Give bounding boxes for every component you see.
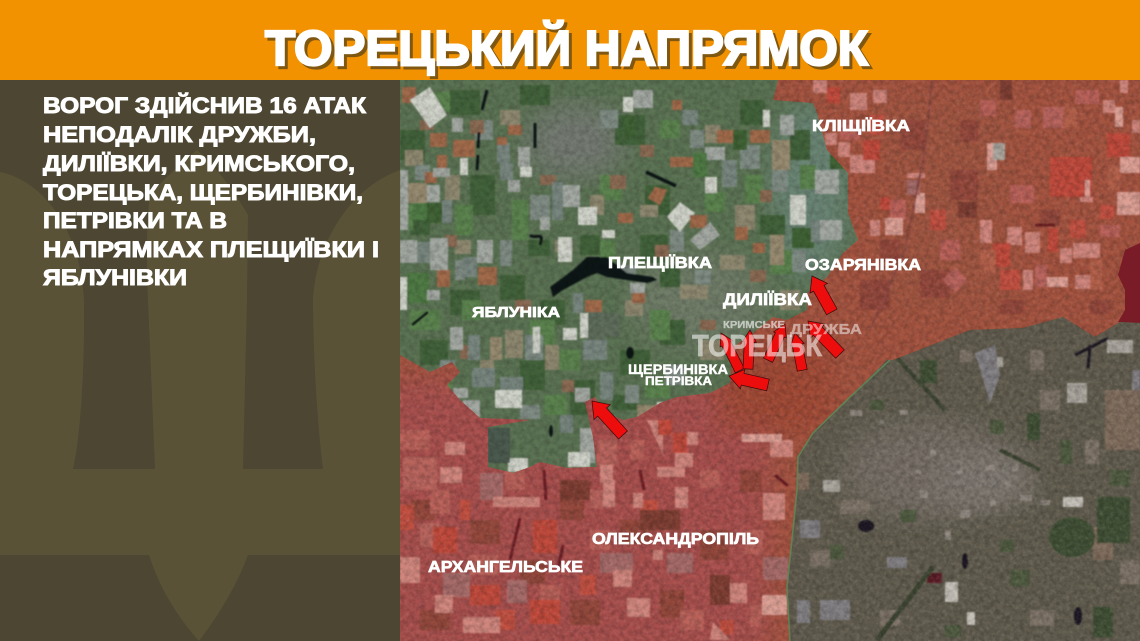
arrow: Kryms'ke centre: [741, 330, 757, 369]
mosaic layers: [400, 85, 810, 440]
arrow: Ozarianivka: [803, 271, 841, 317]
label: Toretsk: ТОРЕЦЬК: [692, 328, 822, 363]
arrow: Yablunivka direction: [584, 394, 631, 442]
summary text: ЯБЛУНІВКИ: [43, 265, 187, 290]
label: Arkhanhelske: АРХАНГЕЛЬСЬКЕ: [428, 559, 583, 576]
summary text: [43, 93, 379, 290]
label: Ozarianivka: ОЗАРЯНІВКА: [805, 257, 921, 274]
summary text: ПЕТРІВКИ ТА В: [43, 208, 227, 233]
arrows: enemy attack directions: [584, 271, 847, 442]
label: Krymske: КРИМСЬКЕ: [723, 320, 785, 331]
label: Kliishchiivka: КЛІЩІЇВКА: [812, 117, 911, 135]
map: Horlivka urban area (gray): [780, 310, 1140, 641]
detailed fields: [402, 87, 416, 103]
arrow: Shcherbynivka: [727, 366, 770, 395]
map: reservoir: [1118, 243, 1140, 324]
label: Oleksandropil: ОЛЕКСАНДРОПІЛЬ: [592, 531, 759, 548]
detailed fields: [597, 440, 617, 465]
summary text: ДИЛІЇВКИ, КРИМСЬКОГО,: [43, 151, 355, 176]
arrow: Druzhba: [801, 314, 847, 361]
label: Dyliivka: ДИЛІЇВКА: [723, 290, 812, 309]
left panel: [0, 80, 400, 641]
water bodies: [550, 257, 657, 297]
satellite map: [380, 80, 1140, 641]
label: Druzhba: ДРУЖБА: [790, 321, 862, 338]
map labels: [428, 117, 921, 576]
arrow: Toretsk east: [788, 332, 809, 372]
arrow: Toretsk north: [762, 321, 791, 363]
map: controlled territory fields (green): [400, 80, 880, 490]
map: occupied territory (red): [380, 80, 1140, 641]
label: Petrivka: ПЕТРІВКА: [645, 374, 712, 388]
summary text: НЕПОДАЛІК ДРУЖБИ,: [43, 122, 316, 147]
title: ТОРЕЦЬКИЙ НАПРЯМОК: [265, 21, 868, 76]
label: Pleshchiivka: ПЛЕЩІЇВКА: [608, 254, 713, 272]
header bar: [0, 0, 1140, 80]
summary text: НАПРЯМКАХ ПЛЕЩИЇВКИ І: [43, 237, 379, 262]
trident watermark: [0, 150, 400, 641]
arrow: Kryms'ke west: [715, 330, 746, 374]
summary text: ТОРЕЦЬКА, ЩЕРБИНІВКИ,: [43, 180, 363, 205]
label: Shcherbynivka: ЩЕРБИНІВКА: [628, 361, 728, 377]
label: Yablunivka: ЯБЛУНІКА: [472, 304, 560, 321]
summary text: ВОРОГ ЗДІЙСНИВ 16 АТАК: [43, 93, 367, 118]
mosaic layers: [410, 120, 1110, 630]
